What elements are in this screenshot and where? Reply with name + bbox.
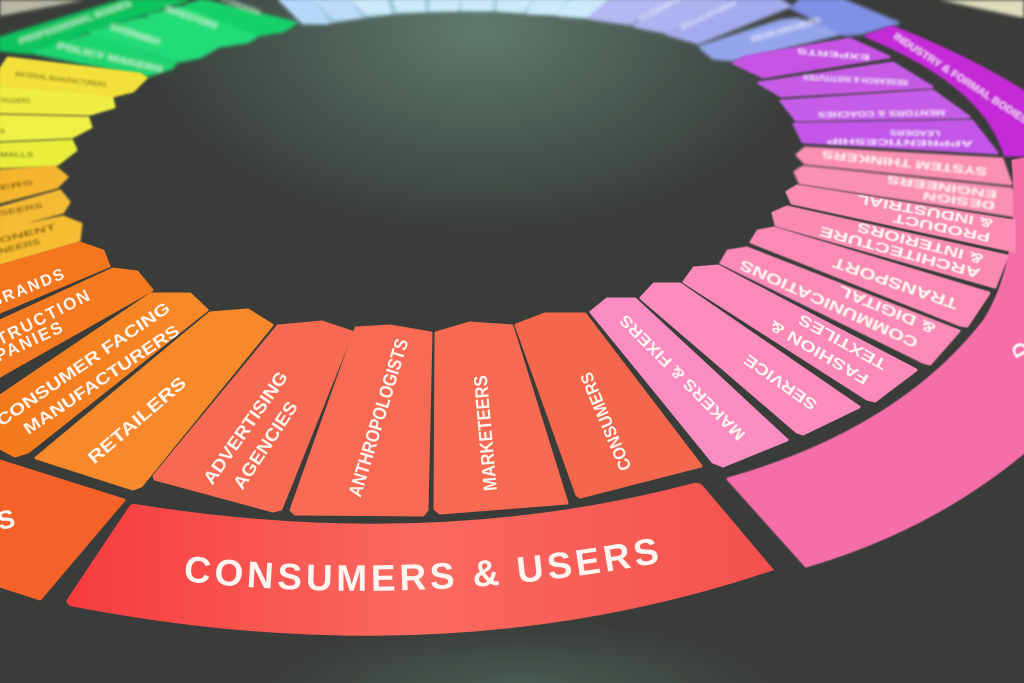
consumers	[516, 314, 701, 497]
retailers	[36, 310, 272, 489]
anthropologists: ANTHROPOLOGISTS	[345, 336, 413, 499]
consumers and users band	[66, 482, 774, 636]
advertising agencies	[154, 322, 352, 511]
yellow segment 2	[0, 88, 114, 114]
green segment 3	[91, 18, 216, 61]
yellow segment 4: MALLS	[0, 152, 33, 159]
transport	[751, 228, 989, 326]
purple segment 3	[781, 91, 969, 120]
green band	[0, 0, 187, 53]
own brands	[0, 243, 109, 312]
gold segment 1	[0, 167, 67, 202]
product and industrial: & INDUSTRIAL	[856, 192, 994, 230]
product and industrial: PRODUCT	[891, 210, 992, 244]
big purple band: INDUSTRY & FORMAL BODIES	[891, 31, 1024, 127]
system thinkers	[797, 148, 1011, 184]
anthropologists	[291, 326, 431, 515]
green band: PROFESSIONAL BODIES	[18, 0, 133, 46]
purple segment 4: APPRENTICESHIP	[826, 136, 973, 148]
green segment 4	[34, 35, 176, 76]
fashion and textiles	[684, 266, 916, 401]
design engineers: DESIGN	[922, 189, 996, 211]
purple segment 4: LEADERS	[890, 128, 940, 138]
service	[641, 284, 859, 434]
communications and digital: COMMUNICATIONS	[737, 256, 921, 350]
periwinkle segments: EDUCATORS	[680, 0, 738, 32]
product and industrial	[787, 186, 1014, 251]
makers and fixers: MAKERS & FIXERS	[616, 311, 749, 443]
design engineers	[795, 167, 1016, 216]
yellow segment 4	[0, 141, 76, 167]
green segment 3: GOVERNMENT	[109, 22, 162, 47]
consumers: CONSUMERS	[576, 369, 635, 474]
purple segment 3: MENTORS & COACHES	[818, 108, 945, 119]
periwinkle segments: RESEARCHERS	[750, 15, 823, 44]
advertising agencies: AGENCIES	[229, 398, 302, 493]
upper-left yellow segments	[0, 58, 146, 264]
architecture and interiors: ARCHITECTURE	[818, 223, 982, 281]
purple segment 1: EXPERTS	[797, 47, 870, 62]
consumers and users band: CONSUMERS & USERS	[186, 538, 658, 591]
green segment 1	[185, 0, 296, 35]
green segment 2	[148, 4, 256, 47]
retailers: RETAILERS	[84, 372, 190, 468]
gold segment 3	[0, 217, 81, 264]
yellow segment 1: MATERIAL MANUFACTURERS	[15, 71, 107, 89]
makers and fixers	[591, 299, 787, 466]
orange band with clipped label	[0, 461, 124, 599]
lower segments, in focus	[0, 242, 918, 636]
gold segment 2	[0, 191, 69, 229]
yellow segment 1	[0, 58, 146, 96]
yellow segment 3	[0, 116, 91, 140]
green segment 2: INVESTORS	[164, 4, 219, 31]
right-hand pink segments, mid focus	[721, 159, 1024, 566]
communications and digital: & DIGITAL	[836, 281, 939, 336]
marketeers	[435, 323, 567, 513]
communications and digital	[721, 248, 959, 364]
purple segment 1	[734, 39, 889, 77]
top arc: green, blue and periwinkle segments	[0, 0, 898, 76]
table corners	[0, 0, 1024, 18]
system thinkers: SYSTEM THINKERS	[821, 148, 988, 177]
transport: TRANSPORT	[831, 253, 960, 312]
yellow segment 3: R	[0, 129, 5, 136]
purple segment 2: RESEARCH & INSTITUTES	[803, 73, 908, 87]
service: SERVICE	[741, 350, 820, 413]
construction companies	[0, 269, 152, 385]
advertising agencies: ADVERTISING	[199, 368, 292, 488]
design engineers: ENGINEERS	[886, 173, 998, 200]
light blue segments	[280, 0, 607, 23]
green segment 4: POLICY MAKERS	[57, 41, 165, 74]
fashion and textiles: FASHION &	[766, 316, 872, 388]
architecture and interiors	[773, 207, 1007, 287]
big pink band	[728, 159, 1024, 566]
marketeers: MARKETEERS	[471, 374, 502, 492]
consumer facing manufacturers: MANUFACTURERS	[21, 322, 183, 438]
yellow segment 2: TRADERS	[0, 98, 30, 105]
purple segment 4	[794, 121, 997, 153]
right-hand purple and pink segments	[734, 27, 1024, 216]
big purple band	[866, 27, 1024, 155]
periwinkle segments	[589, 0, 898, 60]
fashion and textiles: TEXTILES	[796, 310, 890, 373]
architecture and interiors: & INTERIORS	[855, 219, 985, 267]
consumer facing manufacturers	[0, 294, 207, 456]
purple segment 2	[759, 63, 932, 96]
